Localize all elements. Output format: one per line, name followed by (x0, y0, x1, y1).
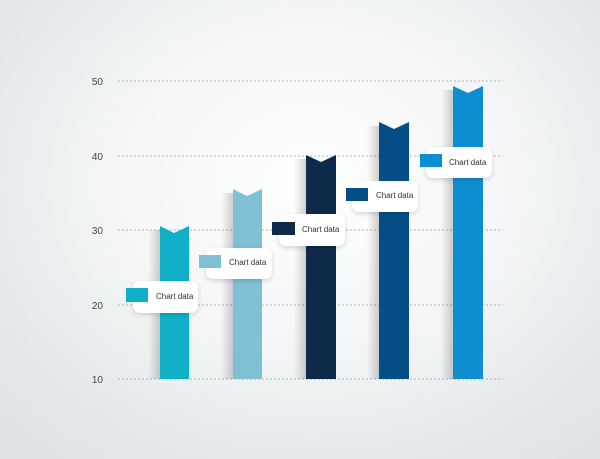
bar 5 (441, 86, 483, 379)
callout 2: Chart data (229, 258, 267, 267)
bar 3 (294, 155, 336, 379)
callout 1: Chart data (156, 292, 194, 301)
axis labels: 50 (92, 77, 103, 88)
bar 1 (148, 226, 189, 379)
callout 3 (272, 214, 345, 246)
callout 4: Chart data (376, 191, 414, 200)
axis labels: 20 (92, 301, 103, 312)
axis labels: 10 (92, 375, 103, 386)
axis labels (92, 77, 103, 386)
callout 2 (199, 248, 272, 279)
axis labels: 40 (92, 152, 103, 163)
axis labels: 30 (92, 226, 103, 237)
callout 4 (346, 181, 418, 212)
callout 5 (420, 147, 492, 178)
callout 5: Chart data (449, 158, 487, 167)
callout 3: Chart data (302, 225, 340, 234)
callout 1 (126, 281, 198, 313)
bar 4 (367, 122, 409, 379)
bar 2 (221, 189, 262, 379)
